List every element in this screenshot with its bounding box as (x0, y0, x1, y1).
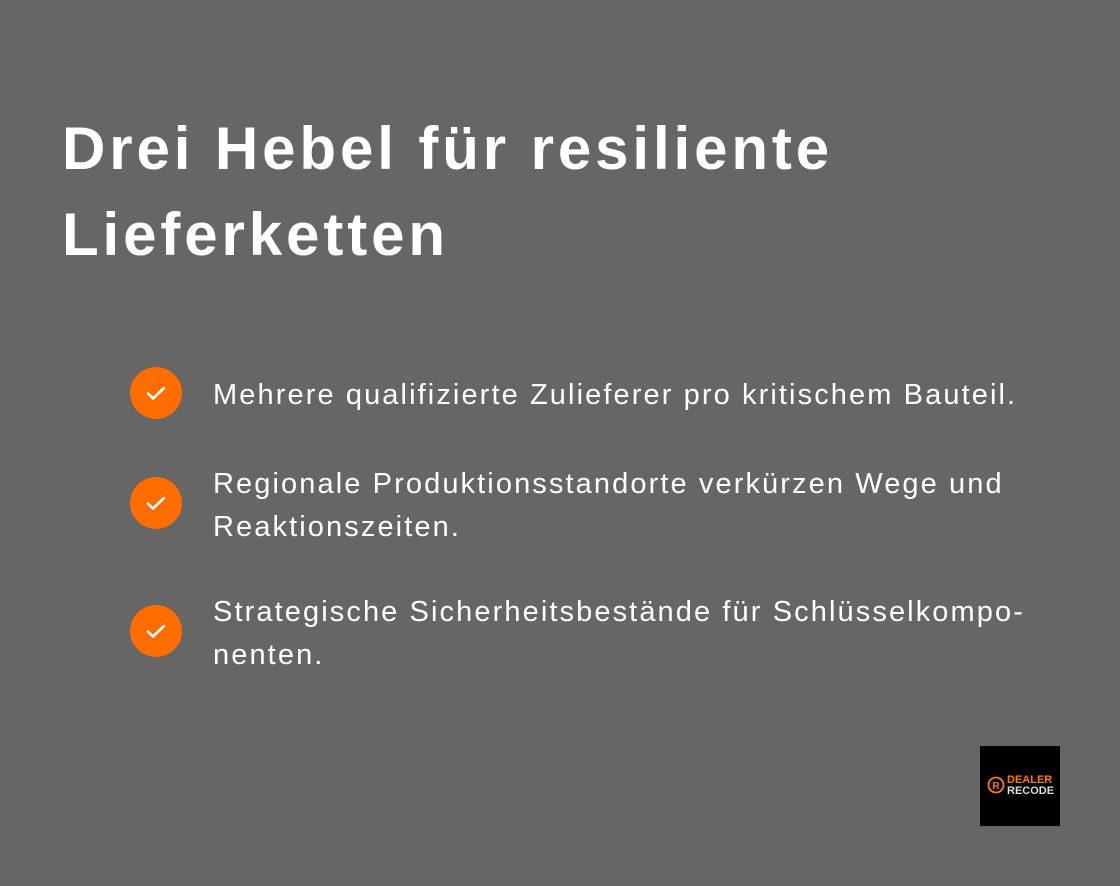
icon: check (130, 605, 182, 657)
icon: check (130, 477, 182, 529)
text 3: nenten. (213, 639, 324, 671)
logo (980, 746, 1060, 826)
text 3: Strategische Sicherheitsbestände für Schlüsselkompo- (213, 596, 1025, 628)
title: Lieferketten (62, 201, 449, 268)
logo: RECODE (1007, 785, 1054, 797)
item 2 (130, 468, 1004, 543)
title (62, 115, 833, 268)
text 3 (213, 596, 1025, 671)
text 1: Mehrere qualifizierte Zulieferer pro kritischem Bauteil. (213, 379, 1017, 411)
text 2: Regionale Produktionsstandorte verkürzen Wege und Reaktionszeiten. (213, 468, 1004, 543)
logo: DEALER (1007, 774, 1052, 786)
logo: R (992, 781, 1000, 792)
title: Drei Hebel für resiliente (62, 115, 833, 182)
icon: check (130, 367, 182, 419)
item 3 (130, 596, 1025, 671)
item 1 (130, 367, 1017, 419)
